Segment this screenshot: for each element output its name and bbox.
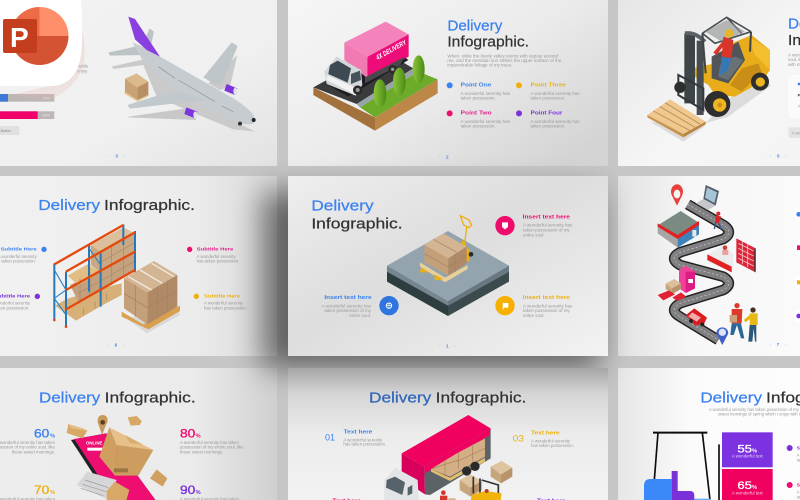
title: Delivery [38, 198, 101, 214]
PowerPoint app icon [0, 0, 85, 100]
illustration: warehouse rack [53, 224, 135, 328]
icon: parcel counter [707, 245, 733, 272]
icon: red car [686, 308, 707, 326]
stat 60%: these sweet mornings. [12, 450, 55, 455]
text block amber: Insert text here [523, 295, 570, 301]
stat card 65%: % [752, 485, 757, 491]
pager [439, 154, 456, 159]
pager: ‹ [439, 343, 441, 348]
PowerPoint app icon: P [10, 22, 29, 53]
title: Infographic. [447, 35, 529, 51]
illustration: phone with parcels [67, 415, 167, 500]
stat 80%: 80 [180, 426, 195, 440]
illustration: delivery truck on ground: 4X DELIVERY [375, 39, 409, 62]
panel: parcel map slide [618, 176, 800, 356]
card fragment [788, 75, 800, 118]
point three: taken possession. [530, 96, 565, 101]
intro paragraph: When, while the lovely valley teems with vapour around [447, 53, 559, 58]
point three [516, 82, 580, 101]
subtitle pink: A wonderful serenity [197, 254, 236, 259]
panel: forklift slide [618, 0, 800, 166]
point one: Point One [461, 83, 491, 89]
pager: › [454, 154, 456, 159]
icon: post office building [658, 211, 699, 248]
title: Delivery [369, 390, 432, 406]
illustration: platform with pallet jack [387, 216, 509, 316]
stat card 55%: 55 [737, 443, 752, 455]
item 03: has taken possession. [531, 443, 574, 448]
illustration: delivery truck on ground [313, 22, 438, 131]
point two: taken possession. [461, 124, 496, 129]
text block blue: A wonderful serenity has [322, 303, 371, 308]
panel: bottom-left percentages slide [0, 368, 277, 500]
pager: › [785, 342, 787, 347]
pager [770, 342, 787, 347]
stat card 65%: 65 [737, 480, 752, 492]
list item purple [787, 445, 800, 462]
panel: truck slide [288, 0, 608, 166]
text block pink: A wonderful serenity has [523, 223, 572, 228]
icon: rider [714, 212, 721, 229]
title: Infographic. [311, 216, 403, 232]
text block pink: Insert text here [523, 214, 570, 220]
stat card 65%: A wonderful text [732, 490, 764, 495]
title [38, 198, 195, 214]
text block amber [523, 295, 572, 318]
intro paragraph [447, 53, 562, 68]
point two [447, 110, 510, 129]
point one: taken possession. [461, 96, 496, 101]
pager: 3 [115, 154, 118, 159]
item 03: Text here [531, 431, 560, 437]
pager: › [454, 343, 456, 348]
button fragment [0, 126, 19, 135]
text block blue: taken possession of my [324, 308, 372, 313]
illustration: phone with parcels: ONLINE [86, 440, 102, 445]
title [311, 199, 403, 232]
text block blue: entire soul. [349, 313, 371, 318]
stat 90%: 90 [180, 483, 195, 497]
text fragment [75, 64, 89, 74]
subtitle amber [194, 293, 247, 310]
text block pink: taken possession of my [523, 227, 571, 232]
pager: 1 [446, 343, 449, 348]
item 03: A wonderful serenity [531, 438, 571, 443]
stat card 65% [722, 469, 773, 500]
pager [108, 154, 125, 159]
item 01 [325, 430, 386, 447]
pager: 2 [446, 154, 449, 159]
pager: 5 [777, 154, 780, 159]
stat 80%: % [196, 433, 201, 439]
item 01: 01 [325, 433, 335, 443]
stat 80% [180, 426, 244, 455]
paragraph fragment [788, 52, 800, 67]
pager [770, 154, 787, 159]
text block blue [322, 295, 372, 318]
stat 80%: possession of my entire soul, like [180, 445, 244, 450]
title fragment [788, 16, 800, 49]
title: Delivery [447, 19, 503, 35]
item 01: A wonderful serenity [343, 437, 383, 442]
point three: A wonderful serenity has [530, 91, 580, 96]
point four [516, 110, 580, 129]
icon: trees [374, 55, 425, 107]
pager: 6 [115, 343, 118, 348]
icon: red map pin [671, 184, 683, 206]
pill fragment [788, 127, 800, 138]
title [700, 390, 800, 406]
center slide shadow [262, 192, 600, 368]
subtitle pink: has taken possession. [197, 259, 239, 264]
icon: pink badge [495, 216, 515, 235]
item 01: Text here [344, 430, 372, 436]
stat 60%: % [50, 433, 55, 439]
stat 70%: 70 [34, 483, 49, 497]
illustration: pink trailer truck [384, 415, 491, 500]
icon: blue pin [716, 327, 728, 345]
icon: cargo pallet [124, 73, 149, 101]
pager: › [123, 154, 125, 159]
text block pink [523, 214, 572, 237]
title [447, 19, 529, 51]
subtitle purple [0, 293, 40, 310]
stat 90% [180, 483, 240, 500]
pager: ‹ [770, 154, 772, 159]
stat card 55% [722, 432, 773, 467]
point one: A wonderful serenity has [461, 91, 510, 96]
point four: taken possession. [530, 124, 565, 129]
subtitle amber: A wonderful serenity [204, 301, 244, 306]
subtitle blue [0, 247, 47, 264]
background bar chart fragment [0, 94, 54, 119]
stat 70%: % [50, 490, 55, 496]
button fragment: Button [1, 129, 11, 133]
stat card 55%: A wonderful text [732, 454, 764, 459]
item 03 [513, 431, 574, 448]
stat card 55%: % [752, 448, 757, 454]
pager: ‹ [439, 154, 441, 159]
stat 80%: A wonderful serenity has taken [180, 440, 240, 445]
icon: stacked cartons [460, 461, 512, 497]
pager: ‹ [770, 342, 772, 347]
text fragment: enable [75, 64, 89, 69]
text fragment: enjoy [77, 69, 88, 74]
icon: laptop [696, 185, 719, 210]
panel: center slide pallet jack [288, 176, 608, 356]
icon: courier and customer [730, 303, 758, 342]
subtitle amber: Subtitle Here [204, 293, 240, 299]
stat 80%: these sweet mornings. [180, 450, 223, 455]
stat 90%: % [196, 490, 201, 496]
text block amber: taken possession of my [523, 308, 571, 313]
icon: amber flag [495, 296, 515, 315]
title [369, 390, 526, 406]
subtitle amber: has taken possession. [204, 305, 247, 310]
subtitle blue: Subtitle Here [1, 247, 37, 253]
icon: small forklift [470, 477, 502, 500]
icon: worker [440, 490, 456, 500]
illustration: stacked cartons on pallet [122, 261, 180, 333]
item 01: has taken possession. [343, 442, 386, 447]
pager: › [123, 343, 125, 348]
point three: Point Three [531, 83, 566, 89]
list item pink [787, 482, 800, 499]
text block amber: entire soul. [523, 313, 545, 318]
subtitle pink [187, 247, 239, 264]
text block pink: entire soul. [523, 232, 545, 237]
pager [439, 343, 456, 348]
pager: 7 [777, 342, 780, 347]
pager: › [785, 154, 787, 159]
stat 70% [0, 483, 56, 500]
pager: ‹ [107, 343, 109, 348]
pager: ‹ [108, 154, 110, 159]
intro text [709, 407, 800, 417]
title: Delivery [700, 390, 763, 406]
icon: carton and parcels [658, 279, 686, 301]
panel: bottom-center truck slide [288, 368, 608, 500]
stat 60%: 60 [34, 426, 49, 440]
icon: blue globe [379, 296, 399, 315]
point two: Point Two [461, 111, 492, 117]
point two: A wonderful serenity has [461, 119, 510, 124]
stat 60% [0, 426, 56, 455]
icon: wooden pallet [647, 99, 708, 142]
illustration: winding delivery road [674, 204, 729, 340]
panel: warehouse rack slide [0, 176, 277, 356]
text block blue: Insert text here [324, 295, 372, 301]
panel: airplane slide [0, 0, 277, 166]
list tabs [794, 208, 800, 323]
title: Infographic. [104, 198, 195, 214]
point four: Point Four [531, 111, 563, 117]
title: Delivery [39, 390, 101, 406]
text block amber: A wonderful serenity has [523, 303, 572, 308]
title [39, 390, 196, 406]
title: Infographic. [105, 390, 196, 406]
intro paragraph: me, and the meridian sun strikes the upper surface of the [447, 58, 562, 63]
icon: parcel locker [736, 238, 756, 272]
point four: A wonderful serenity has [530, 119, 580, 124]
intro paragraph: impenetrable foliage of my trees. [447, 63, 512, 68]
subtitle pink: Subtitle Here [197, 247, 234, 253]
item 03: 03 [513, 434, 524, 444]
panel: bottom-right slide [618, 368, 800, 500]
title: Delivery [311, 199, 375, 215]
title: Infographic. [436, 390, 526, 406]
background bar chart fragment: 60% [43, 96, 51, 100]
point one [447, 82, 510, 101]
icon: airplane [108, 17, 256, 132]
illustration: forklift [674, 17, 772, 123]
pager [107, 343, 125, 348]
illustration: forklift outline [644, 433, 719, 500]
icon: mailbox [679, 266, 695, 293]
background bar chart fragment: 80% [43, 114, 51, 118]
